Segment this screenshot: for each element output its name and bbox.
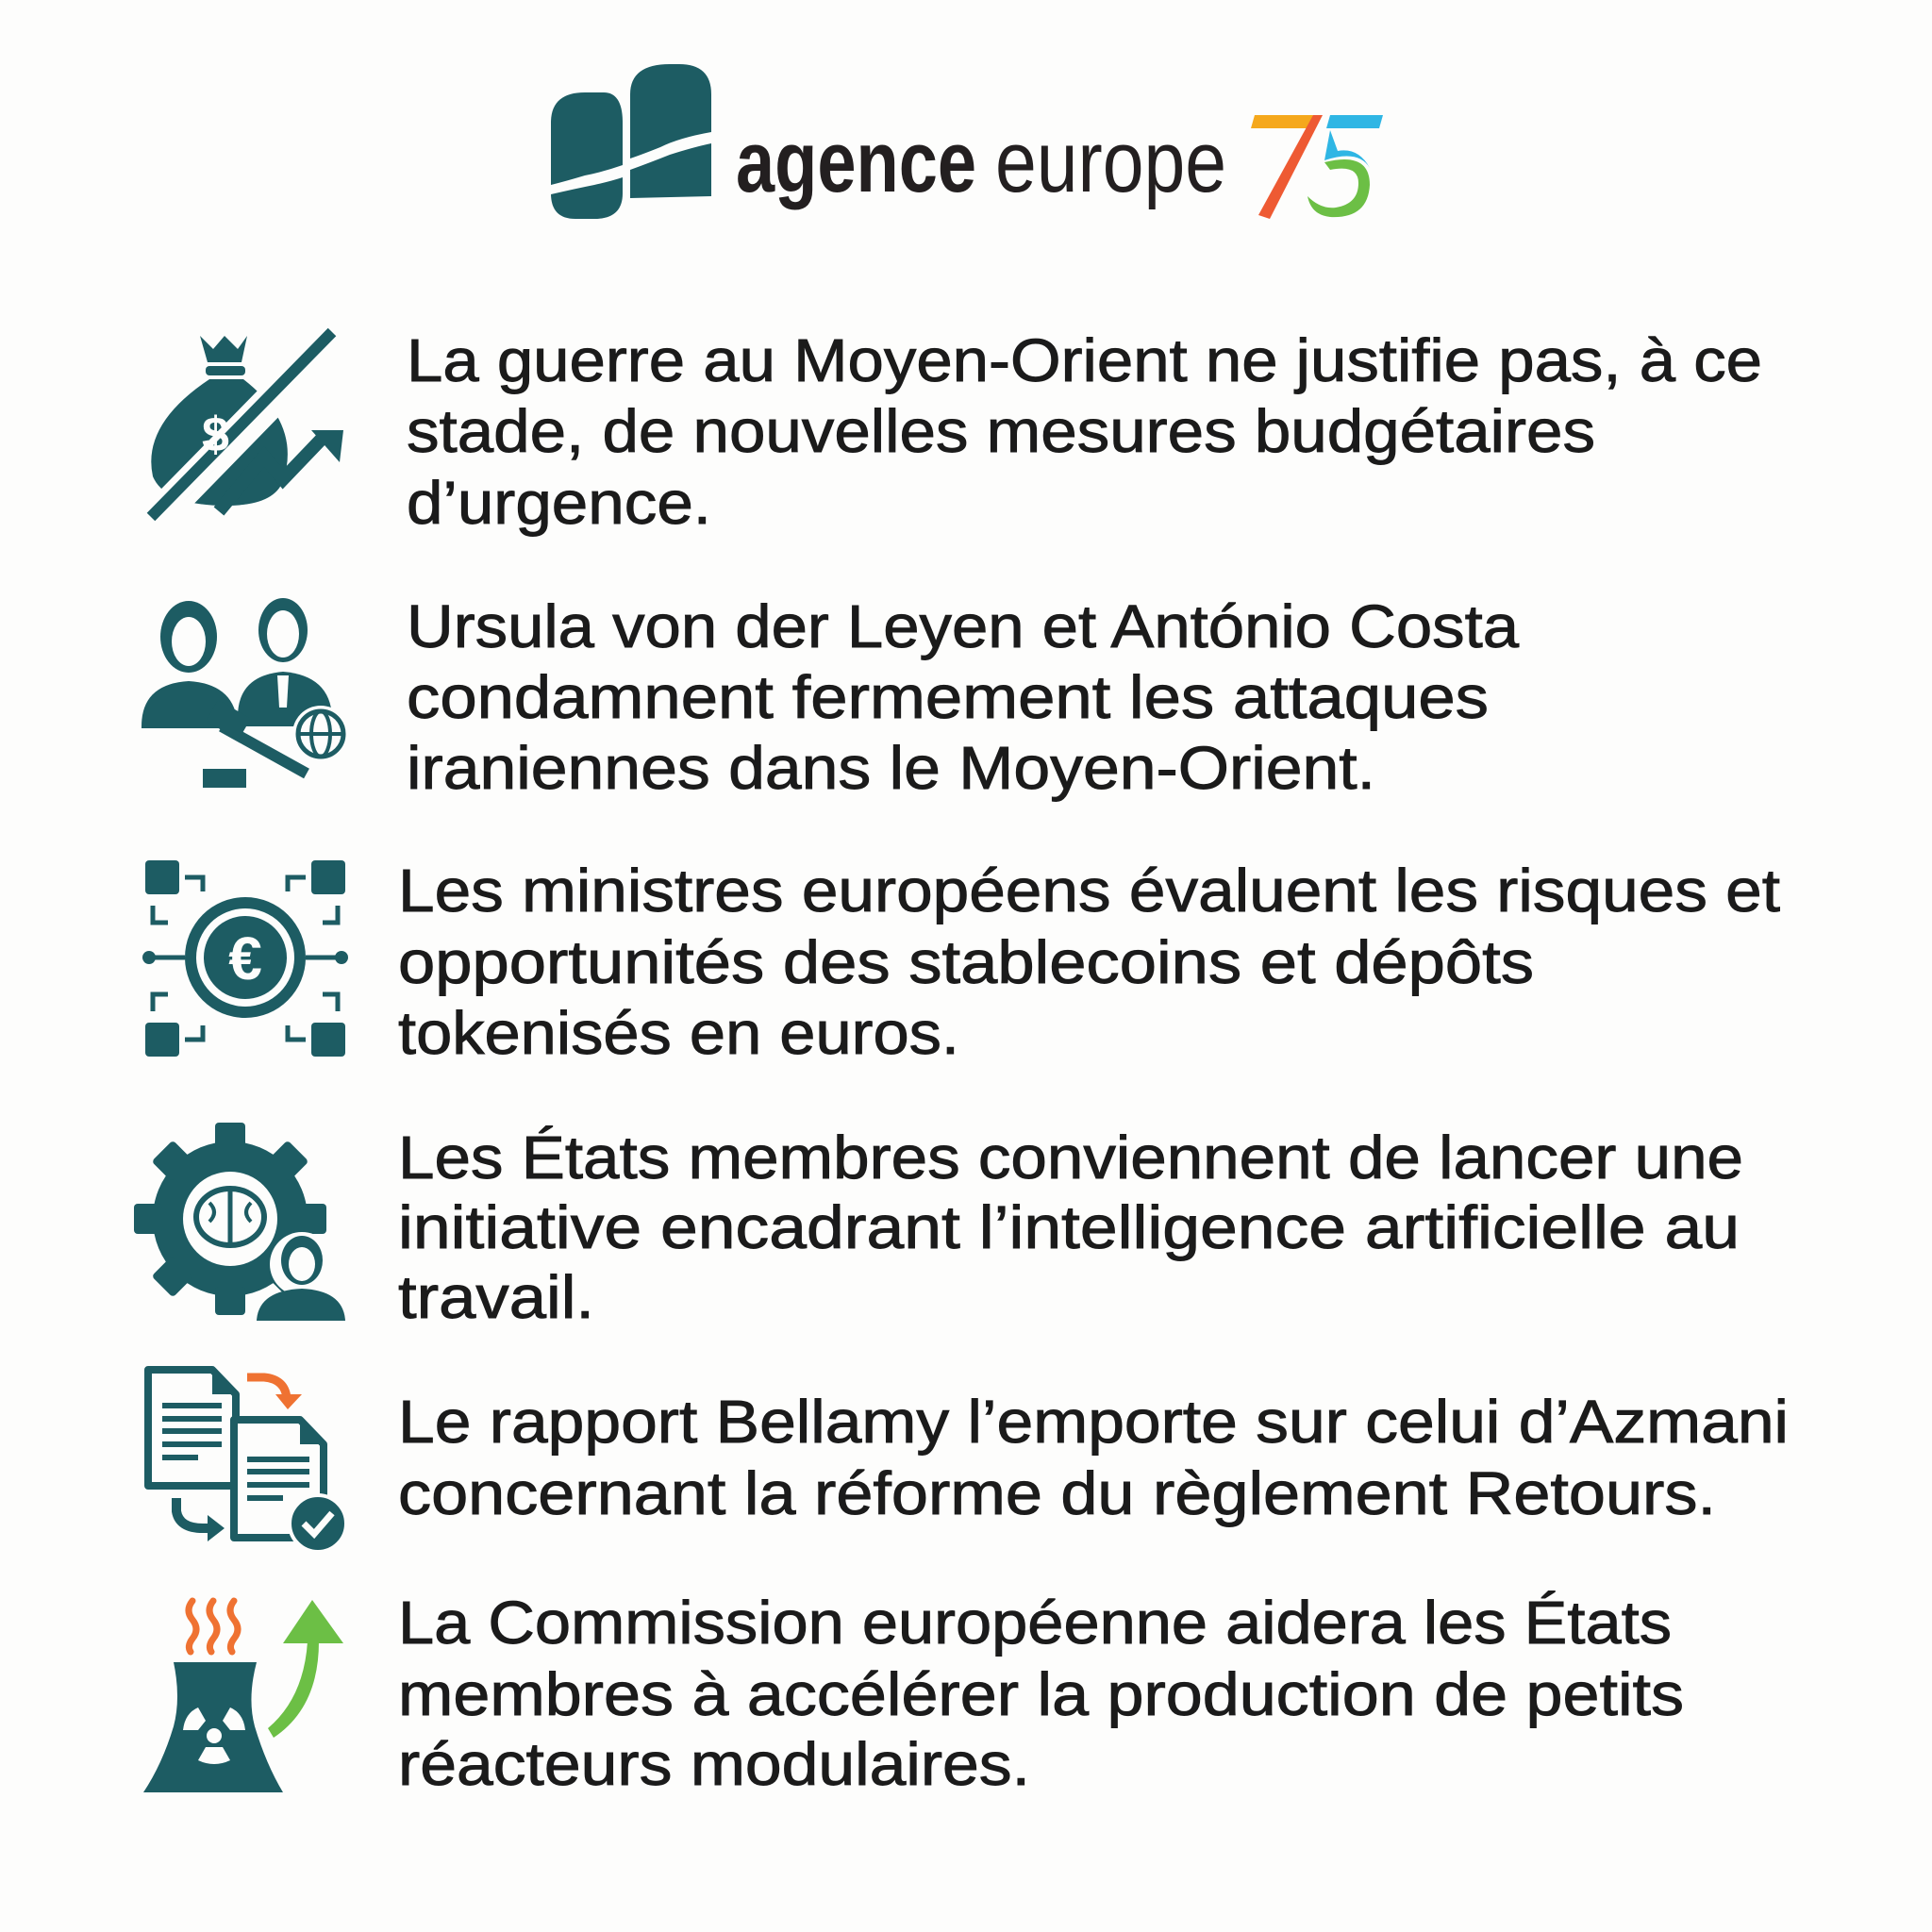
item 4 [134, 1123, 1743, 1331]
text 5 [398, 1388, 1789, 1527]
icon: nuclear cooling tower with growth arrow [143, 1600, 343, 1792]
logo mark [551, 64, 711, 219]
text 3 [398, 857, 1780, 1067]
item 1 [151, 326, 1762, 537]
text 6 [398, 1589, 1684, 1798]
logo 75 [1251, 115, 1383, 219]
icon: money bag with slash and rising arrow: $ [202, 408, 229, 462]
icon: euro network: € [228, 924, 262, 992]
icon: money bag with slash and rising arrow [151, 332, 343, 517]
text 5: concernant la réforme du règlement Retours. [398, 1459, 1716, 1527]
text 4 [398, 1124, 1743, 1331]
icon: leaders with gavel and globe [142, 598, 349, 788]
text 1: stade, de nouvelles mesures budgétaires [407, 397, 1595, 465]
icon: documents with arrows and check [148, 1370, 346, 1552]
item 3 [142, 857, 1780, 1067]
icon: gear with brain and worker [134, 1123, 345, 1321]
text 3: Les ministres européens évaluent les risques et [398, 857, 1780, 924]
text 2 [407, 592, 1519, 802]
text 1 [407, 326, 1762, 537]
logo text: agence [736, 114, 976, 210]
item 2 [142, 592, 1519, 802]
text 4: Les États membres conviennent de lancer une [398, 1124, 1743, 1191]
text 3: tokenisés en euros. [398, 999, 959, 1067]
text 6: membres à accélérer la production de petits [398, 1660, 1684, 1728]
logo [551, 64, 1383, 219]
text 2: iraniennes dans le Moyen-Orient. [407, 734, 1375, 802]
text 6: réacteurs modulaires. [398, 1730, 1030, 1798]
item 6 [143, 1589, 1684, 1798]
text 4: initiative encadrant l’intelligence artificielle au [398, 1193, 1740, 1261]
text 3: opportunités des stablecoins et dépôts [398, 928, 1534, 996]
text 2: condamnent fermement les attaques [407, 663, 1489, 731]
text 1: La guerre au Moyen-Orient ne justifie pas, à ce [407, 326, 1762, 394]
text 2: Ursula von der Leyen et António Costa [407, 592, 1519, 660]
text 4: travail. [398, 1263, 594, 1331]
item 5 [148, 1370, 1789, 1552]
text 6: La Commission européenne aidera les États [398, 1589, 1672, 1657]
logo: europe [995, 114, 1226, 210]
text 5: Le rapport Bellamy l’emporte sur celui d’Azmani [398, 1388, 1789, 1456]
text 1: d’urgence. [407, 469, 711, 537]
icon: euro network [142, 860, 348, 1057]
